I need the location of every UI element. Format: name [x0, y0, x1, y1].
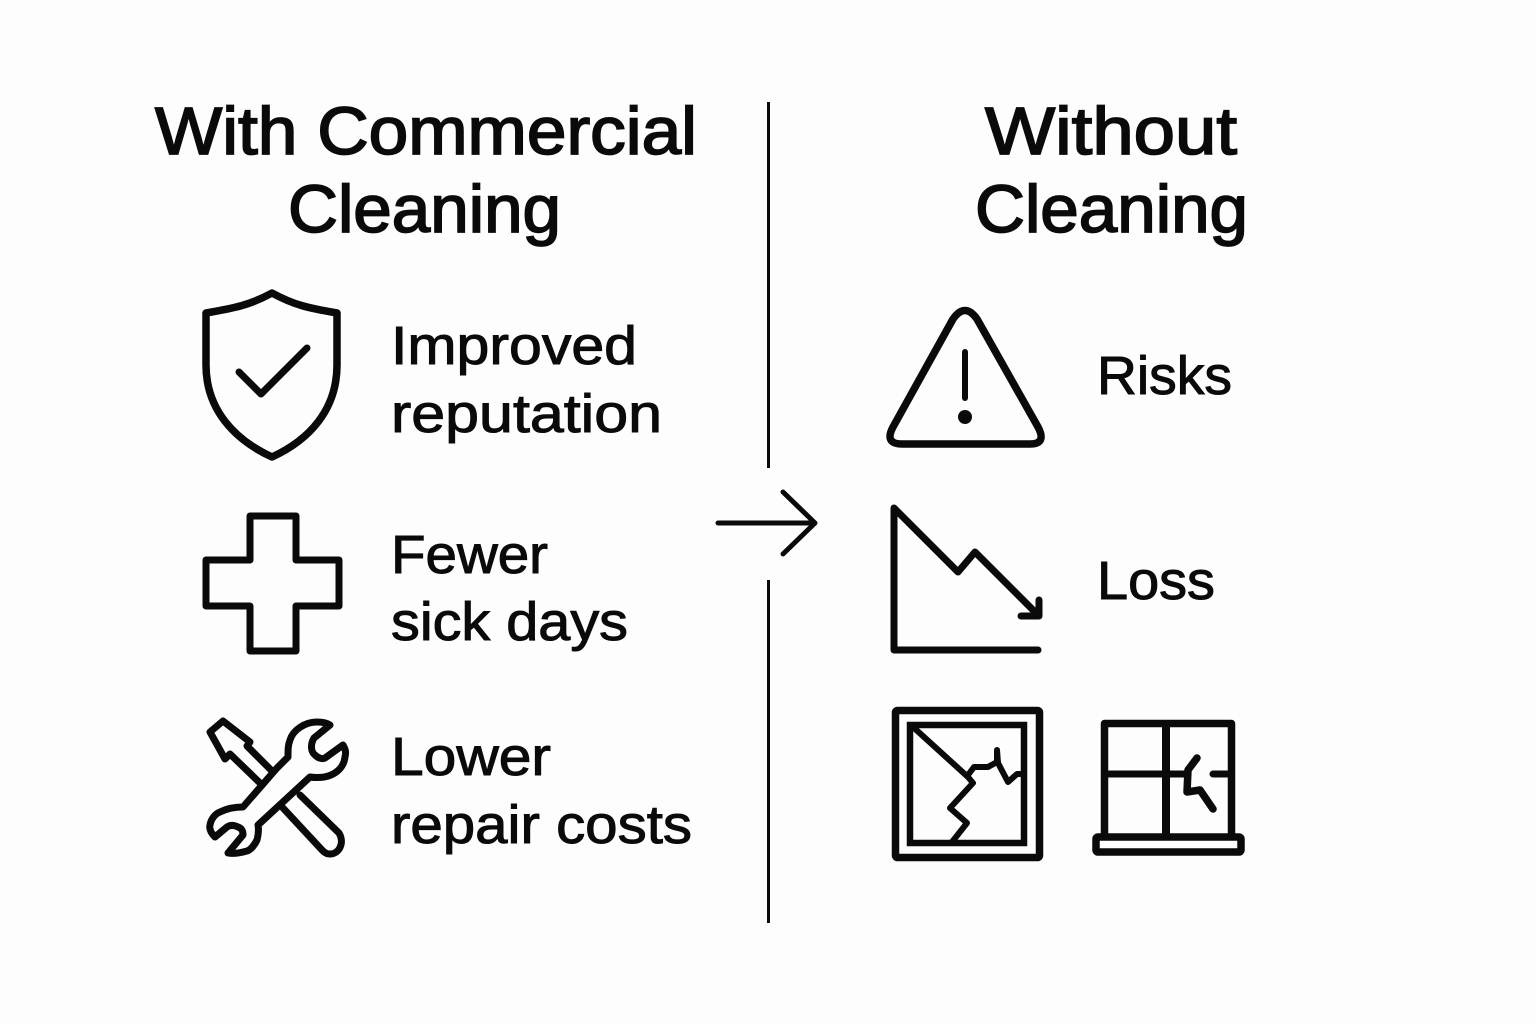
icon: right arrow [718, 492, 815, 554]
text: improved reputation: reputation [391, 384, 662, 444]
heading: with commercial cleaning: Cleaning [288, 172, 561, 247]
icon: crossed screwdriver and wrench [210, 721, 346, 854]
panel: without cleaning [890, 94, 1248, 858]
text: fewer sick days [391, 525, 628, 652]
heading: with commercial cleaning [155, 94, 697, 247]
divider with arrow [718, 102, 815, 923]
text: loss: Loss [1097, 551, 1215, 611]
icon: medical cross [206, 516, 339, 651]
heading: without cleaning: Cleaning [975, 172, 1248, 247]
icon: cracked window with sill [1096, 724, 1241, 852]
text: risks: Risks [1097, 346, 1232, 406]
icon: warning triangle [890, 310, 1041, 444]
text: lower repair costs [391, 727, 692, 855]
text: lower repair costs: repair costs [391, 795, 692, 855]
text: improved reputation [391, 316, 662, 444]
icon: shield with check [206, 293, 337, 457]
heading: without cleaning: Without [985, 94, 1237, 169]
text: improved reputation: Improved [391, 316, 637, 376]
text: fewer sick days: Fewer [391, 525, 548, 585]
icon: broken window pane [896, 710, 1040, 858]
heading: without cleaning [975, 94, 1248, 247]
text: fewer sick days: sick days [391, 592, 628, 652]
heading: with commercial cleaning: With Commercial [155, 94, 697, 169]
text: lower repair costs: Lower [391, 727, 551, 787]
icon: declining chart [894, 508, 1039, 650]
panel: with commercial cleaning [155, 94, 697, 855]
